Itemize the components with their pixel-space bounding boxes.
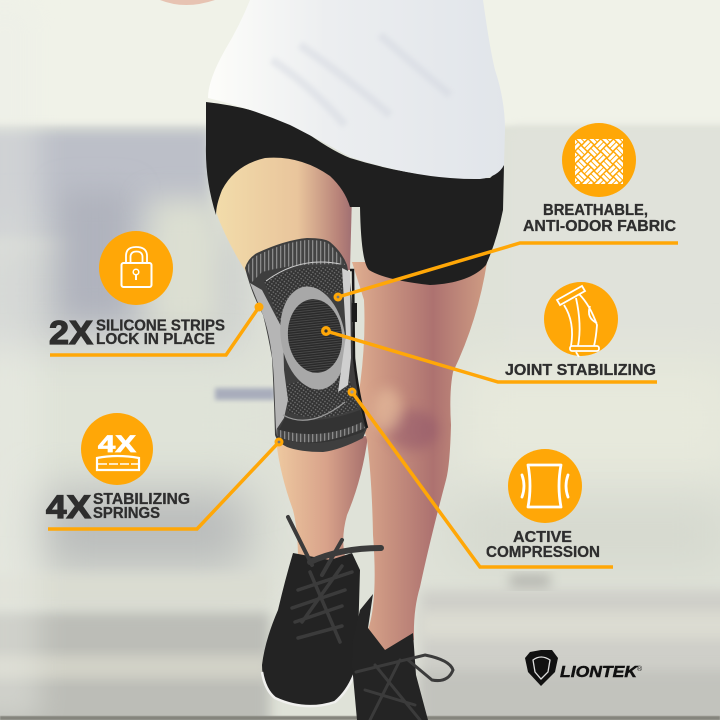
shorts [206, 102, 504, 285]
text: active compression [486, 529, 600, 561]
knee brace [245, 238, 367, 452]
right shoe laces [356, 655, 453, 720]
icon: compression [508, 449, 582, 523]
logo: Liontek: ® [637, 665, 643, 673]
knee cap shading [386, 410, 438, 450]
callout line: silicone strips [50, 302, 264, 355]
shirt [208, 0, 505, 179]
text: active compression: COMPRESSION [486, 544, 600, 561]
text: 4X stabilizing springs: SPRINGS [93, 505, 160, 522]
callout line: joint stabilizing [321, 326, 657, 382]
icon: padlock [99, 231, 173, 305]
callout line: stabilizing springs [48, 438, 284, 529]
text: 2X silicone strips: LOCK IN PLACE [96, 331, 215, 348]
text: breathable fabric: BREATHABLE, [543, 202, 648, 219]
hand at top [160, 0, 215, 5]
left thigh [216, 150, 352, 272]
text: active compression: ACTIVE [513, 529, 572, 546]
text: 4X stabilizing springs: 4X [46, 489, 92, 525]
icon: knee sleeve [544, 282, 618, 357]
left calf [276, 436, 368, 560]
icon: 4X springs: 4X [98, 431, 136, 458]
text: 4X stabilizing springs: STABILIZING [93, 491, 190, 508]
logo: Liontek [525, 650, 643, 686]
right leg [352, 262, 487, 660]
text: joint stabilizing: JOINT STABILIZING [505, 362, 656, 379]
logo: Liontek: LIONTEK [560, 664, 639, 681]
text: breathable fabric: ANTI-ODOR FABRIC [523, 218, 676, 235]
text: 2X silicone strips: 2X [49, 314, 93, 351]
callout line: active compression [348, 388, 613, 567]
callout line: breathable fabric [334, 243, 678, 302]
text: 2X silicone strips [49, 314, 225, 351]
left shoe [262, 553, 360, 706]
icon: 4X springs [81, 413, 153, 485]
text: breathable fabric [523, 202, 676, 235]
text: 2X silicone strips: SILICONE STRIPS [96, 318, 225, 334]
text: 4X stabilizing springs [46, 489, 190, 525]
icon: woven fabric [562, 123, 636, 197]
runner figure [160, 0, 505, 720]
left shoe laces [288, 517, 381, 642]
right shoe [352, 594, 428, 720]
